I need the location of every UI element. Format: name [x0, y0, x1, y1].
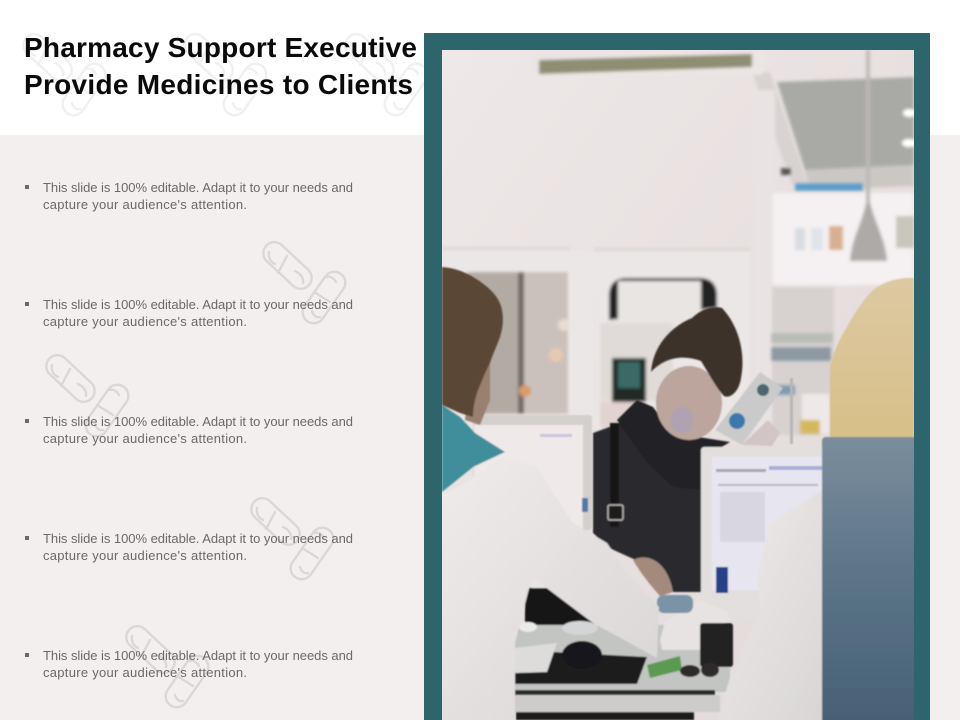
bullet item 2: This slide is 100% editable. Adapt it to your needs and [43, 297, 353, 312]
right computer monitor [701, 447, 824, 622]
bullet item 4 [25, 531, 353, 563]
counter desk [515, 625, 730, 720]
bullet item 2: capture your audience's attention. [43, 314, 247, 329]
title [24, 32, 417, 100]
monitor stand and desk equipment [524, 587, 594, 626]
bullet item 1 [25, 180, 353, 212]
papers, stamp and green lighter [647, 595, 733, 678]
bullet item 2 [25, 297, 353, 329]
shelves with products [771, 287, 834, 435]
bullet item 4: This slide is 100% editable. Adapt it to your needs and [43, 531, 353, 546]
bullet item 3 [25, 414, 353, 446]
left computer monitor [473, 415, 592, 530]
watermark pill icons in header [19, 30, 432, 120]
wall display [600, 278, 717, 428]
background: white header band [0, 0, 960, 135]
illuminated sign with posters [773, 183, 914, 285]
title: Pharmacy Support Executive [24, 32, 417, 63]
photo: pharmacy counter scene [442, 50, 917, 720]
bullet item 5: capture your audience's attention. [43, 665, 247, 680]
ceiling and back wall [754, 72, 914, 358]
bullet item 4: capture your audience's attention. [43, 548, 247, 563]
watermark pill icons in content band [42, 238, 350, 712]
left pharmacist [442, 267, 659, 720]
air conditioning unit [530, 51, 763, 75]
right pharmacist [718, 278, 917, 720]
bullet item 3: capture your audience's attention. [43, 431, 247, 446]
door frames [442, 247, 750, 431]
bullet item 1: This slide is 100% editable. Adapt it to your needs and [43, 180, 353, 195]
customer woman [593, 307, 742, 596]
background window [467, 272, 570, 414]
bullet item 5 [25, 648, 353, 680]
pendant lamp [850, 50, 887, 261]
product box on counter [715, 372, 793, 446]
mouse pad, keyboard and mouse [515, 621, 647, 684]
teal photo frame [424, 33, 930, 720]
bullet item 1: capture your audience's attention. [43, 197, 247, 212]
bullet item 5: This slide is 100% editable. Adapt it to your needs and [43, 648, 353, 663]
title: Provide Medicines to Clients [24, 69, 413, 100]
bullet list [25, 180, 353, 680]
bullet item 3: This slide is 100% editable. Adapt it to your needs and [43, 414, 353, 429]
